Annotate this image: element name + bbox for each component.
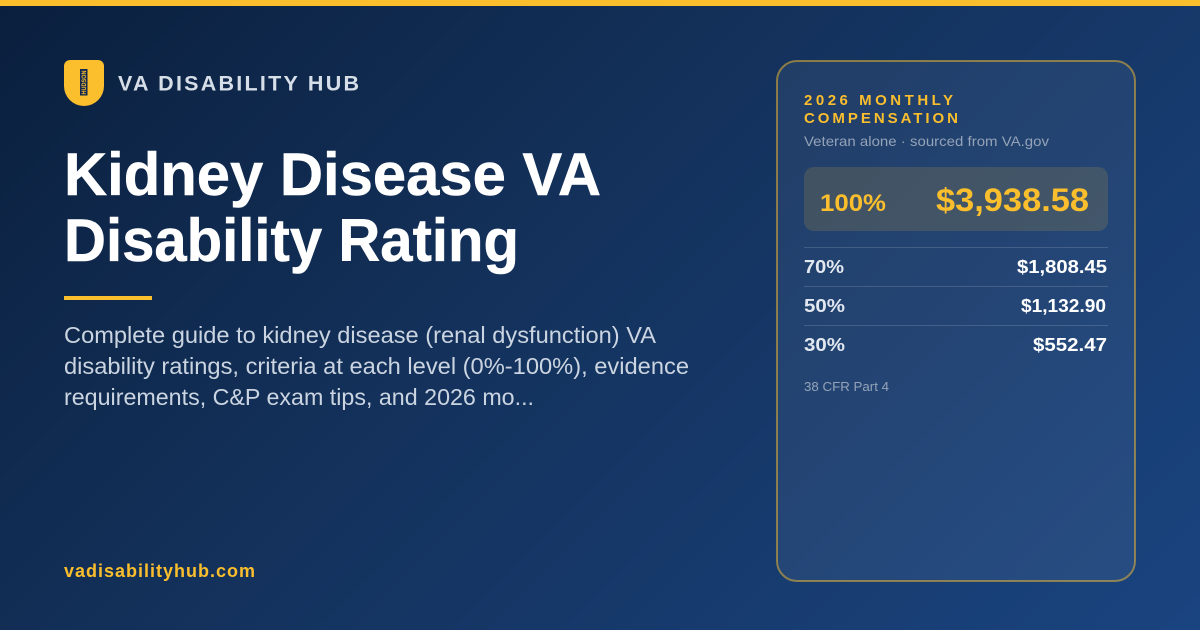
description: Complete guide to kidney disease (renal dysfunction) VA (64, 322, 657, 348)
title: Disability Rating (64, 207, 519, 274)
title underline (64, 296, 152, 300)
brand header (64, 60, 359, 106)
rate row: 30%: 30% (804, 335, 845, 355)
rate row: 50%: $1,132.90 (1021, 296, 1106, 316)
rate row: 70% (804, 247, 1108, 277)
source note: 38 CFR Part 4 (804, 379, 889, 394)
rate row: 50%: 50% (804, 296, 845, 316)
title (64, 141, 601, 274)
icon: shield logo: HUDSON (82, 70, 88, 94)
card subheading: Veteran alone · sourced from VA.gov (804, 133, 1049, 149)
brand name: VA DISABILITY HUB (118, 72, 359, 96)
rate row: 70%: $1,808.45 (1017, 257, 1107, 277)
description (64, 322, 689, 410)
title: Kidney Disease VA (64, 141, 601, 208)
highlight row: 100%: $3,938.58 (936, 182, 1089, 218)
card heading: COMPENSATION (804, 110, 958, 127)
rate row: 70%: 70% (804, 257, 844, 277)
card heading: 2026 MONTHLY (804, 92, 953, 109)
website url: vadisabilityhub.com (64, 561, 255, 581)
card heading (804, 92, 958, 127)
description: disability ratings, criteria at each level (0%-100%), evidence (64, 353, 689, 379)
panel: compensation card (777, 61, 1135, 581)
rate row: 30%: $552.47 (1033, 335, 1107, 355)
rate row: 50% (804, 286, 1108, 316)
highlight row: 100% (804, 167, 1108, 231)
highlight row: 100%: 100% (820, 190, 886, 217)
icon: shield logo (64, 60, 104, 106)
top accent bar (0, 0, 1200, 6)
rate row: 30% (804, 325, 1108, 355)
description: requirements, C&P exam tips, and 2026 mo... (64, 384, 534, 410)
